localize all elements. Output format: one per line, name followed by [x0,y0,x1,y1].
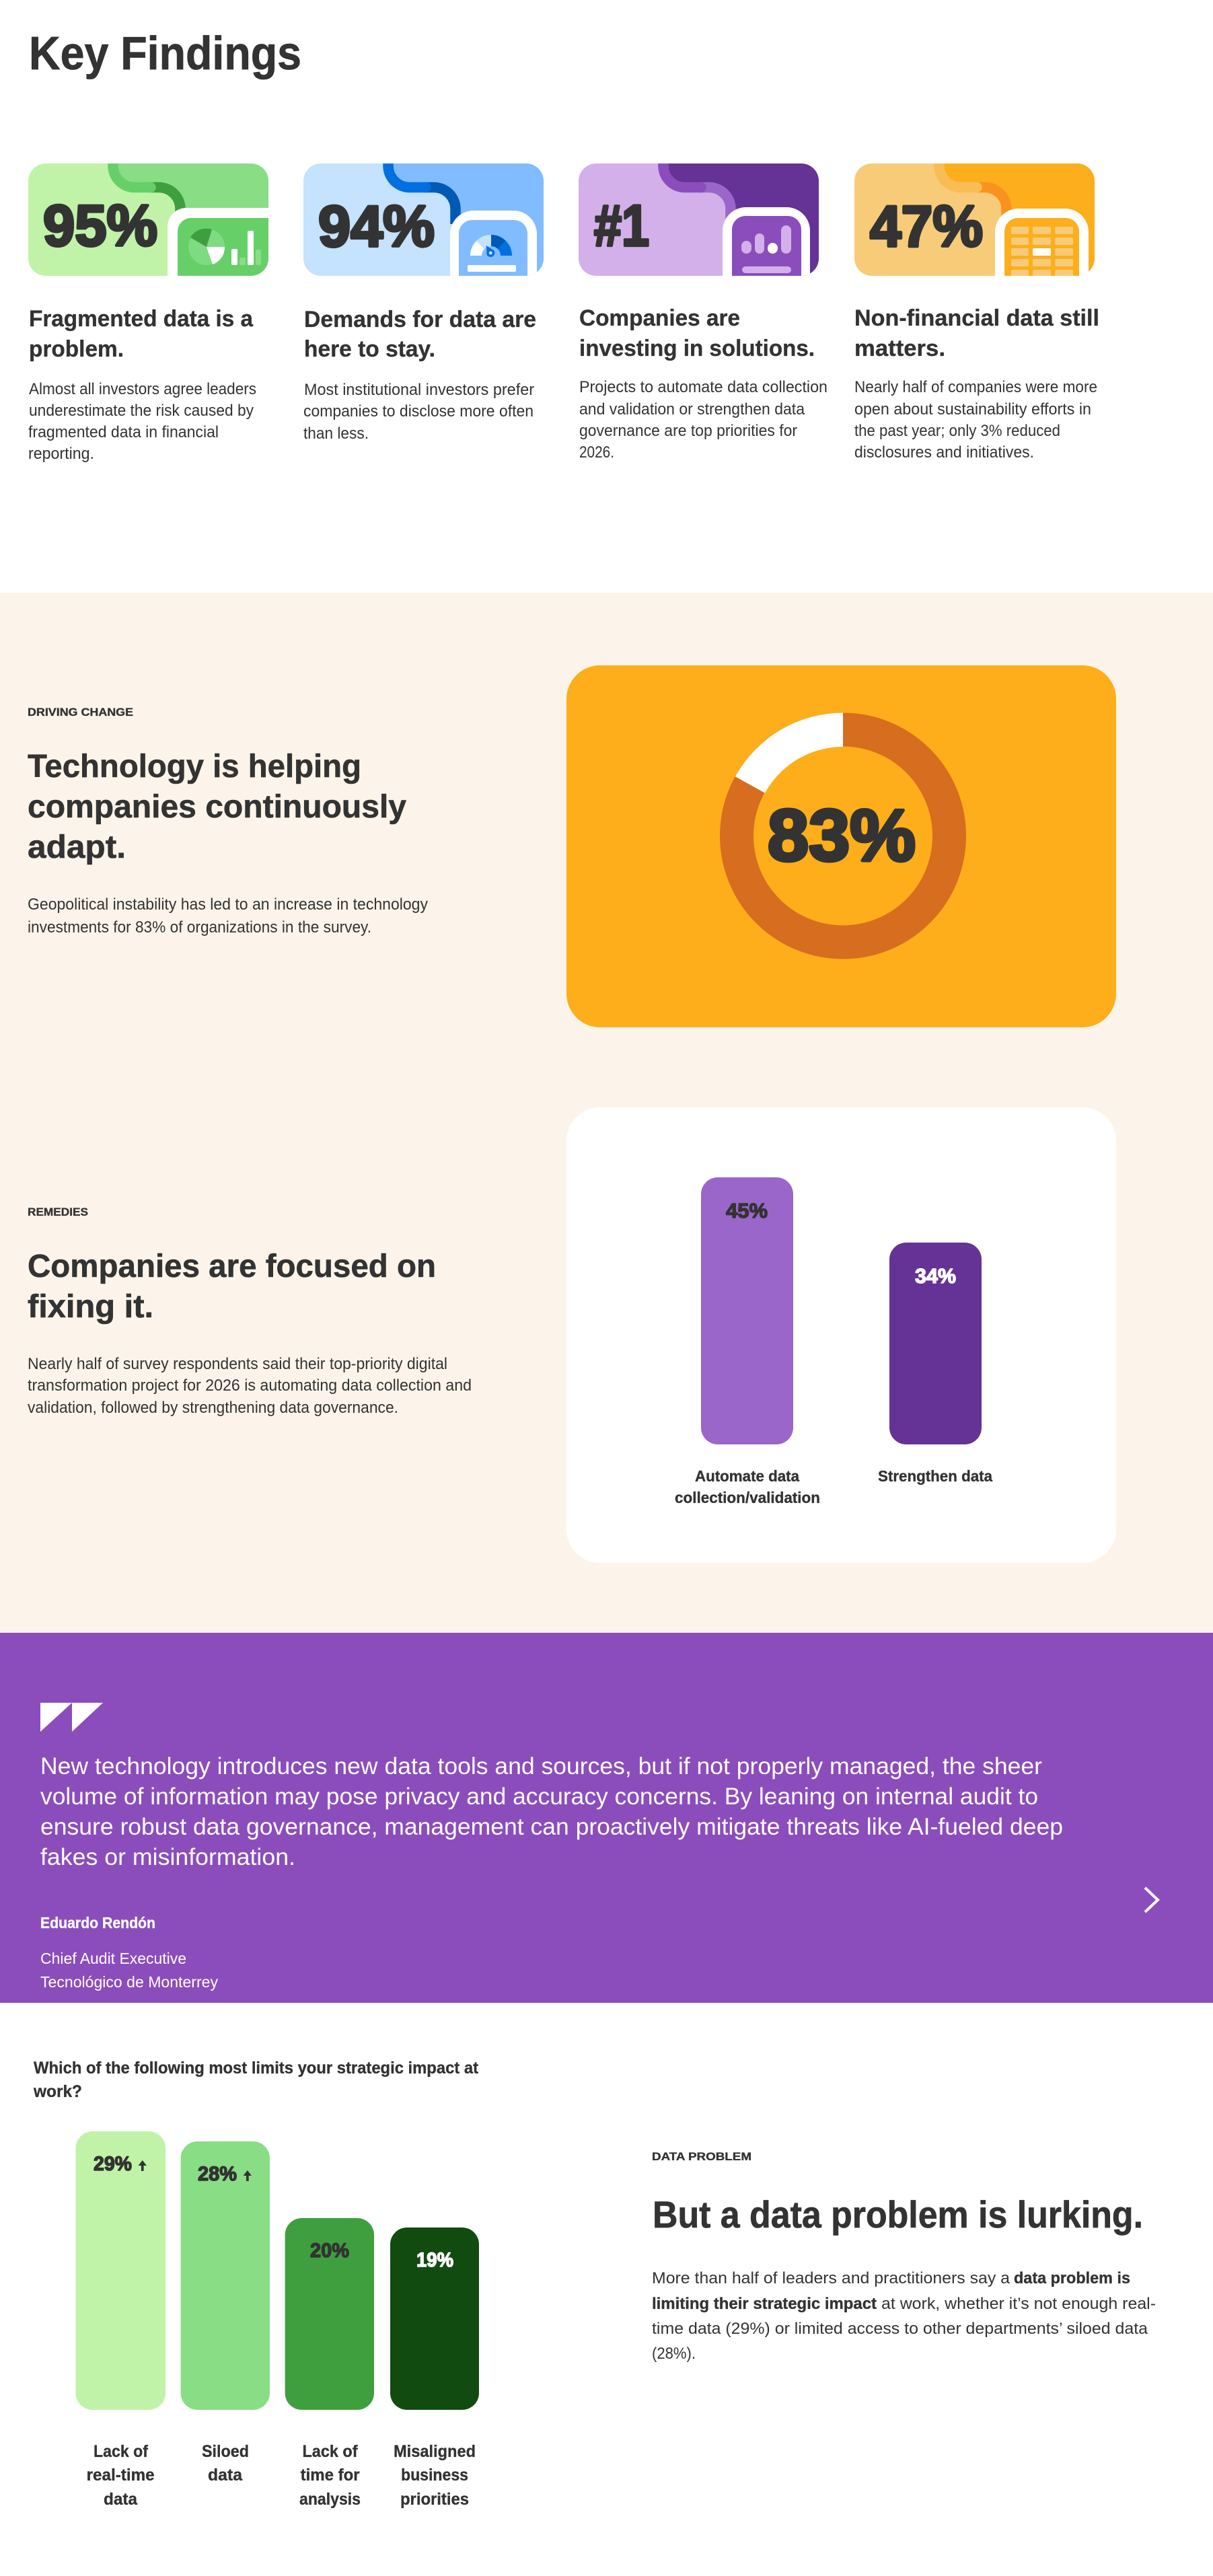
heading: demands for data [304,307,536,362]
label: misaligned business priorities: Misaligned [394,2442,476,2461]
label: lack of real-time data [87,2442,155,2509]
text: fragmented data body: Almost all investors agree leaders [29,380,256,398]
text block: driving change [28,706,428,936]
text: fragmented data body: fragmented data in financial [28,423,219,441]
quote text: fakes or misinformation. [40,1844,295,1870]
text: fragmented data body: underestimate the risk caused by [29,402,254,420]
text: demands for data body [303,381,534,443]
label: lack of time for analysis: Lack of [303,2442,358,2461]
donut chart [735,713,949,942]
text: remedies body: Nearly half of survey respondents said their top-priority digital [28,1355,447,1373]
label: lack of time for analysis: analysis [299,2490,361,2509]
bar: lack of time 20%: 20% [310,2240,349,2262]
attribution: Chief Audit Executive [40,1950,186,1967]
bar: automate data 45%: 45% [726,1199,768,1222]
text: demands for data body: companies to disclose more often [303,402,534,420]
text: technology body: Geopolitical instability has led to an increase in technology [28,895,428,914]
text: data problem body [652,2269,1156,2363]
bar: lack of real-time data 29%: 29% [94,2153,132,2175]
heading: demands for data: Demands for data are [304,307,536,332]
heading: focused on fixing: Companies are focused on [28,1249,436,1284]
quote text: ensure robust data governance, management can proactively mitigate threats like AI-fueled deep [40,1814,1063,1840]
text: non-financial data body [854,378,1097,462]
icon: quotation marks [40,1703,103,1732]
heading: non-financial data: matters. [854,336,945,361]
quote text: New technology introduces new data tools and sources, but if not properly managed, the sheer [40,1753,1042,1779]
text: non-financial data body: the past year; only 3% reduced [854,422,1060,440]
bar: strengthen data 34%: 34% [915,1264,956,1288]
heading: demands for data: here to stay. [304,336,435,362]
heading: fragmented data [29,306,254,362]
heading: technology: Technology is helping [28,749,361,784]
label: siloed data [202,2442,249,2485]
bar: siloed data 28%: 28% [198,2163,237,2185]
panel: demands for data finding [303,155,544,443]
panel: remedies bar chart card [566,1107,1116,1563]
text: technology body: investments for 83% of organizations in the survey. [28,918,371,936]
text: investing in solutions body: and validation or strengthen data [579,400,805,418]
heading: investing in solutions [579,305,815,361]
attribution: Tecnológico de Monterrey [40,1973,218,1991]
label: siloed data: data [208,2466,243,2485]
illustration: #1 purple card [579,163,819,276]
illustration: 47% orange card [854,163,1095,276]
stat: 94%: 94% [318,194,435,259]
text: investing in solutions body [579,378,828,462]
attribution: Eduardo Rendón [40,1914,155,1931]
text: data problem body: (28%). [652,2345,696,2363]
panel: purple quote band [0,1633,1213,2003]
bar: lack of real-time data 29% [75,2131,166,2410]
text: remedies body: transformation project for 2026 is automating data collection and [28,1376,472,1395]
label: siloed data: Siloed [202,2442,249,2461]
heading: technology: companies continuously [28,789,406,825]
heading: investing in solutions: Companies are [579,305,740,331]
eyebrow: driving change: DRIVING CHANGE [28,706,133,719]
stat: 83%: 83% [768,795,916,877]
stat: #1: #1 [594,194,649,258]
text: non-financial data body: disclosures and initiatives. [854,443,1034,462]
panel: cream background section [0,593,1213,1633]
bar: siloed data 28% [181,2141,270,2410]
illustration: 94% blue card [303,163,544,276]
label: lack of real-time data: Lack of [94,2442,149,2461]
bar: automate data 45% [701,1177,793,1444]
illustration: 95% green card [28,163,268,276]
label: lack of time for analysis [299,2442,361,2509]
heading: fragmented data: Fragmented data is a [29,306,254,332]
text: data problem body: at work, whether it’s not enough real- [881,2295,1156,2313]
panel: non-financial data finding [854,155,1099,462]
text: data problem body: time data (29%) or limited access to other departments’ siloed data [652,2320,1148,2338]
label: misaligned business priorities: business [401,2466,468,2485]
bar: misaligned priorities 19% [390,2228,479,2410]
label: lack of time for analysis: time for [301,2466,360,2485]
label: misaligned business priorities: priorities [400,2490,469,2509]
arrow: next chevron [1145,1888,1158,1912]
text: technology body [28,895,428,936]
label: lack of real-time data: real-time [87,2466,155,2485]
stat: 95%: 95% [43,194,157,258]
eyebrow: data problem: DATA PROBLEM [652,2150,751,2163]
heading: technology: adapt. [28,830,126,865]
bar: misaligned priorities 19%: 19% [416,2249,453,2271]
heading: fragmented data: problem. [29,336,124,362]
heading: non-financial data: Non-financial data still [854,305,1099,331]
heading: non-financial data [854,305,1099,361]
text: demands for data body: Most institutional investors prefer [304,381,534,399]
text block: remedies [28,1206,472,1417]
heading: technology [28,749,406,865]
bar: strengthen data 34% [889,1243,982,1444]
label: misaligned business priorities [394,2442,476,2509]
eyebrow: remedies: REMEDIES [28,1206,88,1218]
text: data problem body: limiting their strategic impact [652,2295,877,2313]
text: fragmented data body [28,380,256,463]
label: automate data [675,1467,820,1506]
heading: focused on fixing: fixing it. [28,1289,153,1325]
heading: focused on fixing [28,1249,436,1325]
text: investing in solutions body: Projects to automate data collection [579,378,828,396]
heading: data problem lurking: But a data problem is lurking. [653,2193,1143,2236]
attribution [40,1914,218,1991]
quote text [40,1753,1063,1870]
bar chart: strategic impact limits [75,2131,479,2509]
heading: investing in solutions: investing in solutions. [579,336,815,361]
label: automate data: Automate data [695,1467,799,1485]
chart question heading [33,2059,479,2101]
bar: lack of time 20% [285,2218,374,2410]
panel: 83% donut chart card [566,665,1116,1027]
panel: investing in solutions finding [579,155,828,462]
text: investing in solutions body: governance are top priorities for [579,422,797,440]
stat: 47%: 47% [870,194,983,259]
text: remedies body: validation, followed by strengthening data governance. [28,1399,398,1417]
panel: fragmented data finding [28,163,268,462]
text: data problem body: data problem is [1014,2269,1130,2287]
text: data problem body: More than half of leaders and practitioners say a [652,2269,1010,2287]
text: fragmented data body: reporting. [28,445,94,463]
text: investing in solutions body: 2026. [579,443,614,462]
text: non-financial data body: Nearly half of companies were more [854,378,1097,396]
title: Key Findings [29,27,301,79]
label: lack of real-time data: data [104,2490,138,2509]
text: non-financial data body: open about sustainability efforts in [854,400,1091,418]
text block: data problem [652,2150,1156,2363]
chart question heading: work? [33,2082,82,2101]
text: remedies body [28,1355,472,1417]
quote text: volume of information may pose privacy and accuracy concerns. By leaning on internal audit to [40,1783,1038,1810]
chart question heading: Which of the following most limits your strategic impact at [34,2059,479,2077]
label: automate data: collection/validation [675,1489,820,1506]
label: strengthen data: Strengthen data [878,1467,992,1485]
text: demands for data body: than less. [303,425,369,443]
